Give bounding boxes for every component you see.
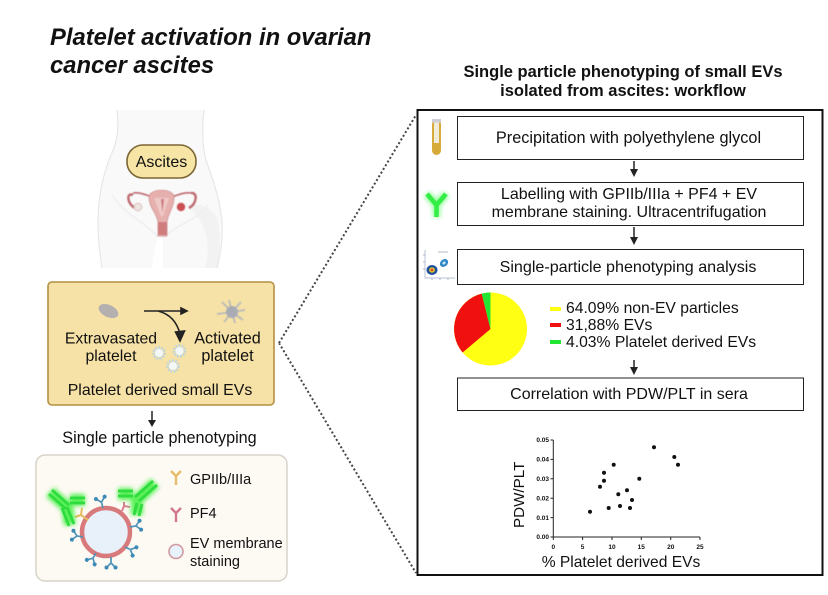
legend: PF4: PF4	[190, 506, 217, 522]
arrow	[630, 360, 638, 375]
step: precipitation: Precipitation with polyethylene glycol	[496, 129, 761, 147]
text: activated platelet: Activated	[194, 330, 261, 348]
pie chart	[454, 292, 527, 366]
legend: GPIIb/IIIa: GPIIb/IIIa	[190, 472, 252, 488]
step: labelling	[458, 182, 804, 226]
icon: flow cytometry plot	[423, 250, 455, 280]
title: cancer ascites	[50, 52, 214, 79]
icon: test tube	[432, 119, 441, 155]
diagram: labelled EV	[49, 481, 157, 570]
scatter plot: 20	[667, 544, 675, 551]
label: ascites	[127, 145, 196, 178]
legend: pie	[550, 300, 756, 351]
step: analysis	[458, 250, 804, 284]
icon: extravasated platelet	[96, 301, 121, 321]
legend: EV membrane staining	[169, 536, 283, 570]
scatter plot: 0	[551, 544, 555, 551]
legend: PF4	[171, 506, 217, 522]
scatter plot: 5	[581, 544, 585, 551]
scatter plot: 15	[638, 544, 645, 551]
step: analysis: Single-particle phenotyping analysis	[500, 258, 756, 276]
heading: workflow: Single particle phenotyping of small EVs	[463, 63, 783, 81]
heading: workflow: isolated from ascites: workflow	[500, 82, 746, 100]
icon: green antibody	[427, 194, 446, 217]
step: labelling: membrane staining. Ultracentrifugation	[492, 204, 766, 221]
icon: activated platelet	[217, 300, 245, 323]
text: panel caption: Platelet derived small EVs	[68, 382, 252, 399]
legend: EV membrane staining: staining	[190, 554, 240, 570]
panel: EV staining	[36, 455, 287, 581]
step: labelling: Labelling with GPIIb/IIIa + PF4 + EV	[501, 186, 757, 203]
antibody: PF4	[122, 502, 130, 511]
text: activated platelet: platelet	[201, 347, 254, 365]
arrow	[630, 227, 638, 245]
title	[50, 24, 371, 79]
legend: pie: 64.09% non-EV particles	[566, 300, 739, 317]
label: ascites: Ascites	[136, 154, 187, 171]
legend: pie: 4.03% Platelet derived EVs	[566, 334, 756, 351]
legend: EV membrane staining: EV membrane	[190, 536, 283, 552]
scatter plot: 25	[696, 544, 704, 551]
text: extravasated platelet: Extravasated	[65, 330, 157, 348]
axis tick labels: 0.04	[536, 456, 549, 464]
icons: small EVs	[154, 346, 185, 372]
x axis label: % Platelet derived EVs	[542, 554, 701, 571]
axis tick labels: 0.01	[536, 515, 549, 522]
arrow: to single particle phenotyping	[148, 411, 156, 427]
illustration: lower body with reproductive organs	[98, 110, 222, 268]
legend: pie: 31,88% EVs	[566, 317, 652, 334]
antibodies: green secondary right	[118, 481, 157, 516]
icon: uterus	[128, 190, 196, 236]
step: correlation	[458, 378, 804, 410]
scatter plot: 10	[608, 544, 616, 551]
y axis label: PDW/PLT	[511, 462, 528, 528]
arrows: activation	[144, 308, 187, 341]
data points	[588, 445, 680, 514]
dotted zoom lines	[279, 115, 416, 573]
panel: platelet derived small EVs	[48, 282, 274, 405]
axis tick labels: 0.05	[536, 437, 549, 444]
step: correlation: Correlation with PDW/PLT in sera	[510, 386, 748, 403]
heading: workflow	[463, 63, 783, 100]
antibody: GPIIb/IIIa	[75, 508, 88, 520]
antibodies: green secondary left	[49, 490, 85, 526]
panel: workflow	[418, 110, 822, 575]
axis tick labels	[536, 437, 549, 541]
step: precipitation	[458, 116, 804, 160]
axis tick labels: 0.00	[536, 534, 549, 541]
axis tick labels: 0.02	[536, 496, 549, 502]
axis tick labels: 0.03	[536, 476, 549, 483]
text: activated platelet	[194, 330, 261, 365]
arrow	[630, 161, 638, 177]
text: extravasated platelet: platelet	[86, 348, 137, 365]
heading: single particle phenotyping: Single particle phenotyping	[62, 429, 257, 447]
title: Platelet activation in ovarian	[50, 24, 371, 51]
scatter plot	[511, 437, 704, 571]
text: extravasated platelet	[65, 330, 157, 365]
